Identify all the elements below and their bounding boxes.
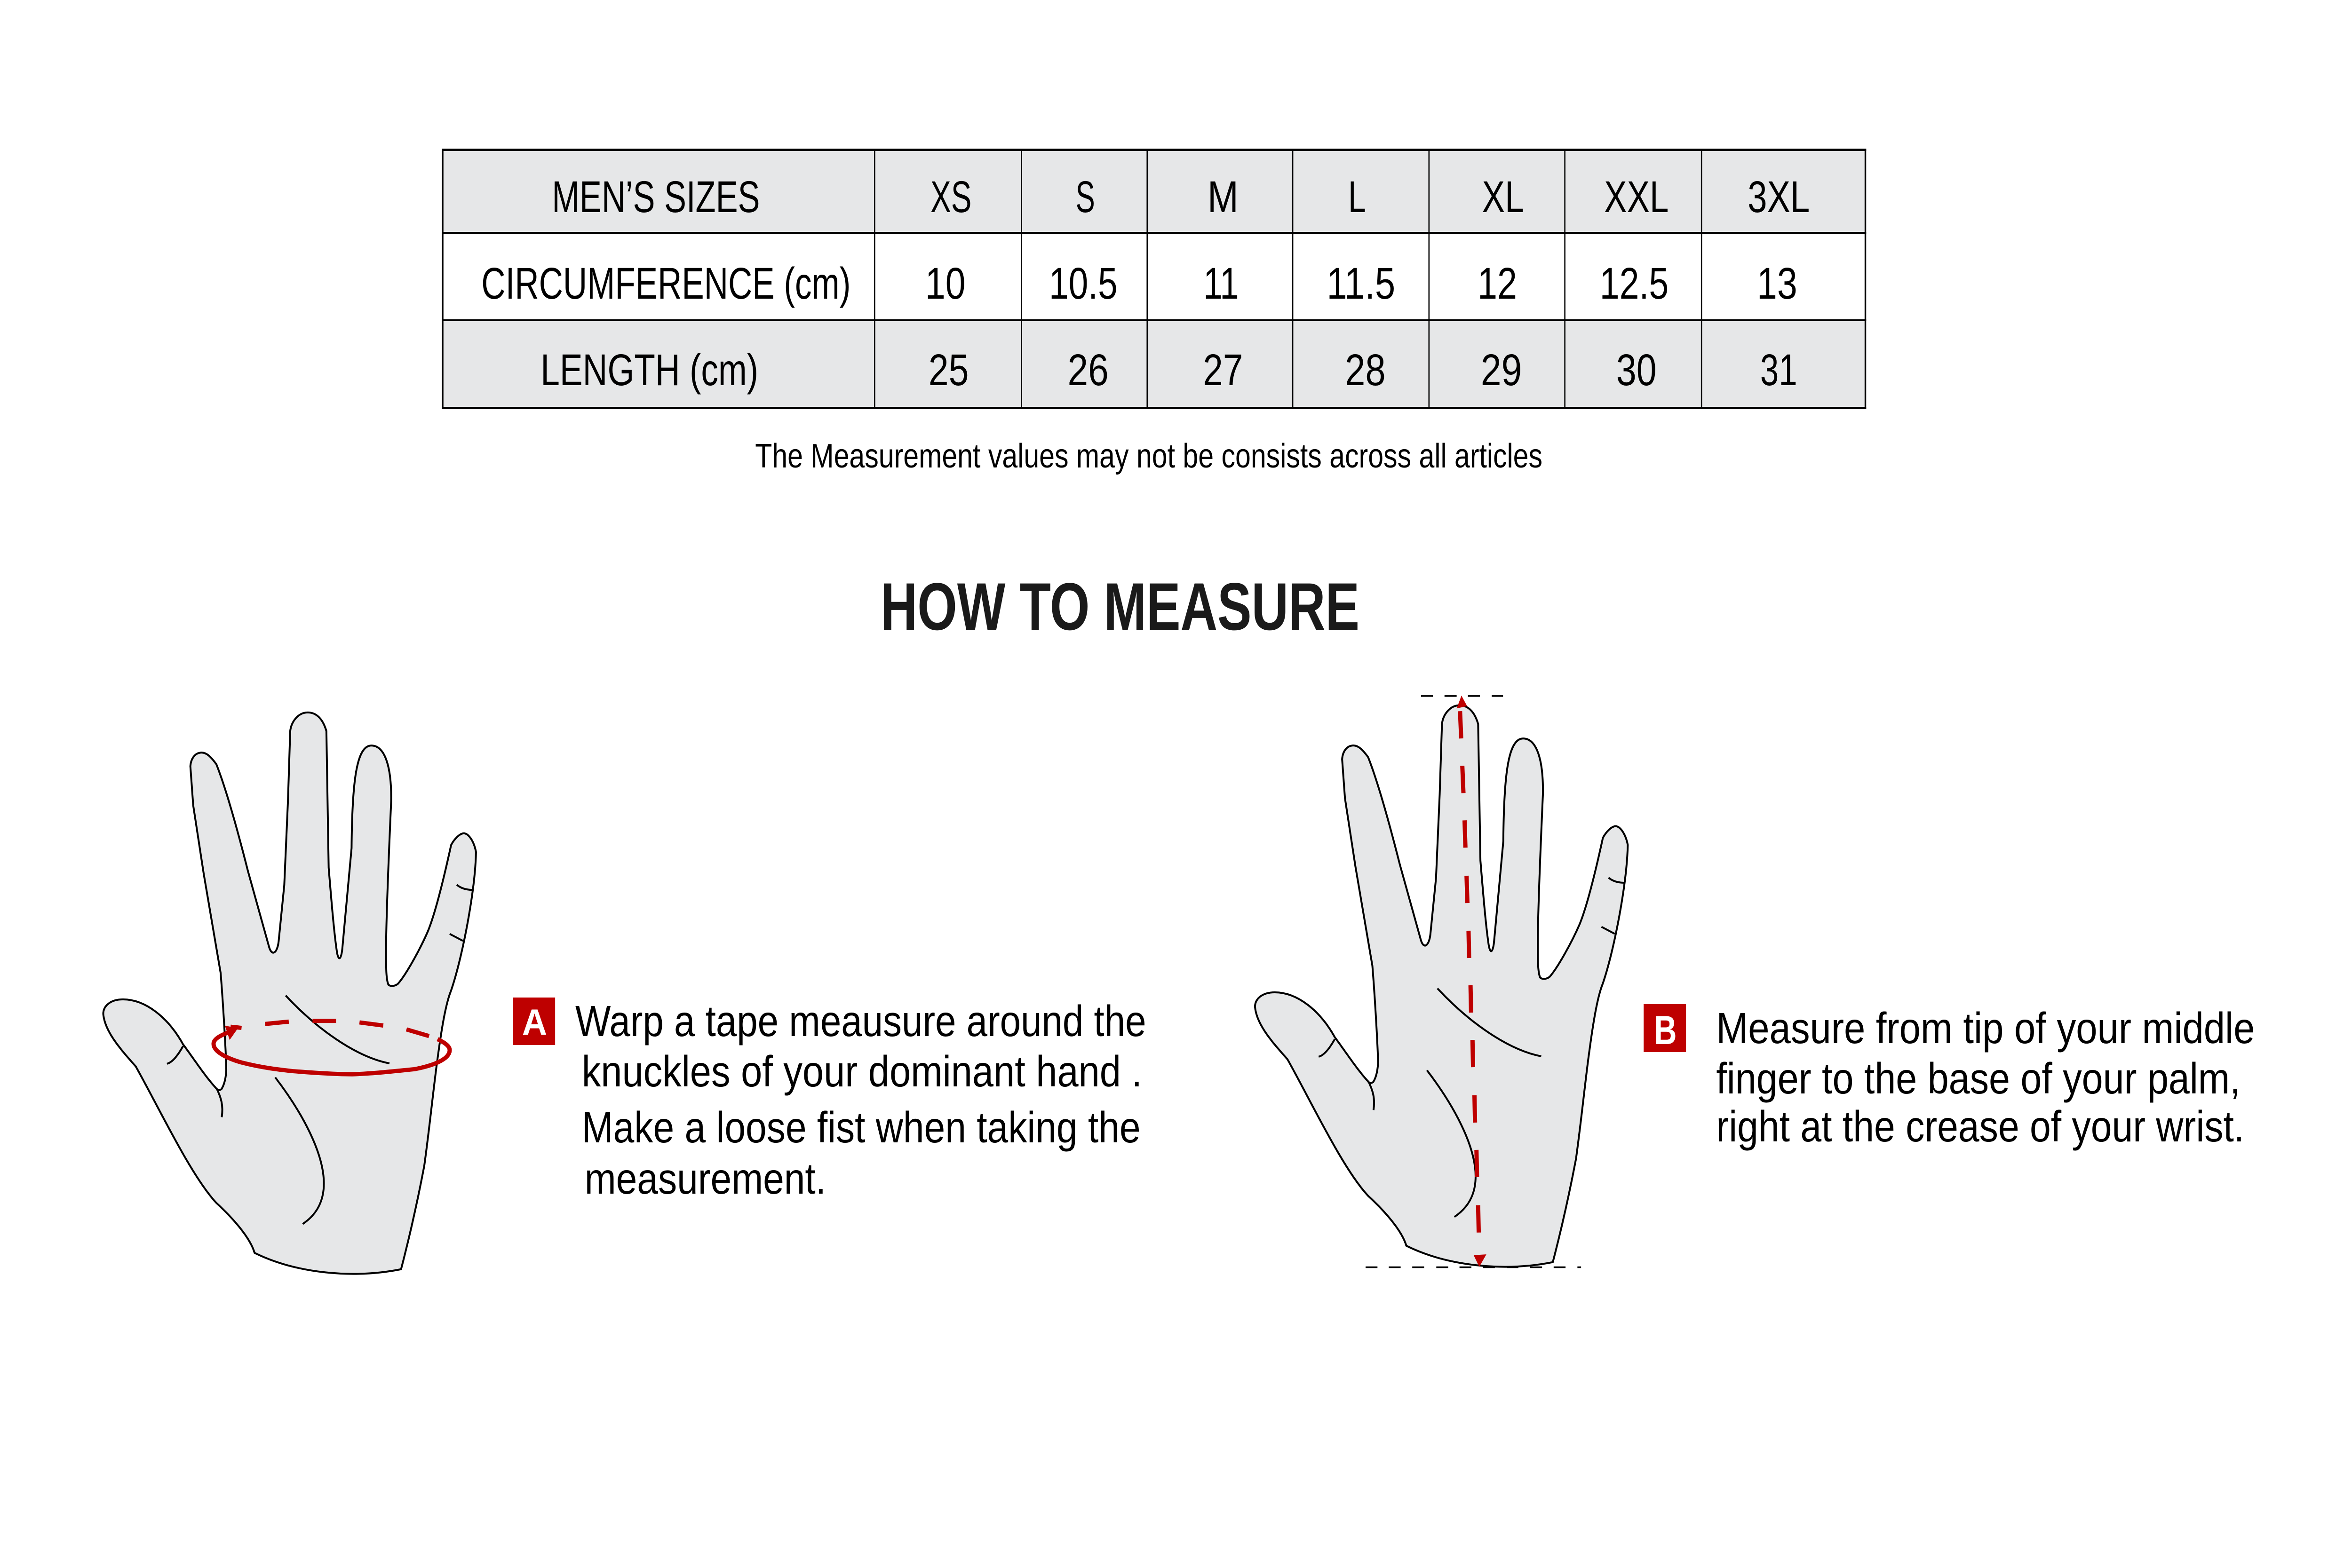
- instructions B: finger to the base of your palm,: [1716, 1054, 2241, 1103]
- hand B with length line: [1255, 696, 1628, 1267]
- value 26: 26: [1067, 345, 1109, 395]
- size S: S: [1076, 172, 1095, 222]
- size table: [442, 149, 1866, 409]
- value 13: 13: [1757, 258, 1797, 308]
- instructions A: measurement.: [585, 1155, 826, 1203]
- size XS: XS: [930, 172, 971, 222]
- instructions A: Make a loose fist when taking the: [582, 1103, 1141, 1152]
- instructions A: Warp a tape meausure around the: [575, 997, 1146, 1045]
- badge A: [513, 998, 555, 1045]
- bottom measure guide: [1366, 1267, 1581, 1268]
- size M: M: [1208, 172, 1239, 222]
- hand A outline: [103, 713, 476, 1274]
- instructions B: right at the crease of your wrist.: [1716, 1102, 2244, 1151]
- badge B: [1644, 1004, 1686, 1053]
- value 12: 12: [1478, 258, 1517, 308]
- value 12.5: 12.5: [1600, 258, 1669, 308]
- size XXL: XXL: [1604, 172, 1669, 222]
- instructions A: [575, 997, 1146, 1203]
- hand B outline: [1255, 705, 1628, 1267]
- circumference row: [481, 258, 1797, 308]
- header row: [552, 172, 1810, 222]
- instructions B: [1716, 1004, 2255, 1151]
- hand B creases: [1319, 878, 1624, 1217]
- instructions B: Measure from tip of your middle: [1716, 1004, 2255, 1053]
- length row: [540, 345, 1797, 395]
- value 11: 11: [1203, 258, 1239, 308]
- badge B: B: [1654, 1008, 1677, 1053]
- hand A with tape around knuckles: [103, 713, 476, 1274]
- value 10: 10: [925, 258, 966, 308]
- value 30: 30: [1616, 345, 1657, 395]
- hand A creases: [167, 885, 472, 1224]
- tape measure loop with arrow: [214, 1021, 450, 1074]
- length arrow: [1457, 696, 1486, 1267]
- badge A: A: [522, 1002, 547, 1043]
- value 31: 31: [1760, 345, 1797, 395]
- size 3XL: 3XL: [1748, 172, 1810, 222]
- value 28: 28: [1345, 345, 1386, 395]
- top measure guide: [1421, 695, 1503, 697]
- value 11.5: 11.5: [1327, 258, 1395, 308]
- label: circumference: CIRCUMFERENCE (cm): [481, 258, 850, 308]
- size L: L: [1348, 172, 1366, 222]
- size XL: XL: [1482, 172, 1524, 222]
- value 29: 29: [1481, 345, 1522, 395]
- value 25: 25: [929, 345, 969, 395]
- value 10.5: 10.5: [1049, 258, 1118, 308]
- label: length: LENGTH (cm): [540, 345, 758, 395]
- instructions A: knuckles of your dominant hand .: [582, 1047, 1142, 1096]
- value 27: 27: [1203, 345, 1243, 395]
- title: how to measure: HOW TO MEASURE: [881, 569, 1359, 644]
- table footnote: The Measurement values may not be consists across all articles: [755, 437, 1542, 475]
- header: men's sizes: MEN’S SIZES: [552, 172, 760, 222]
